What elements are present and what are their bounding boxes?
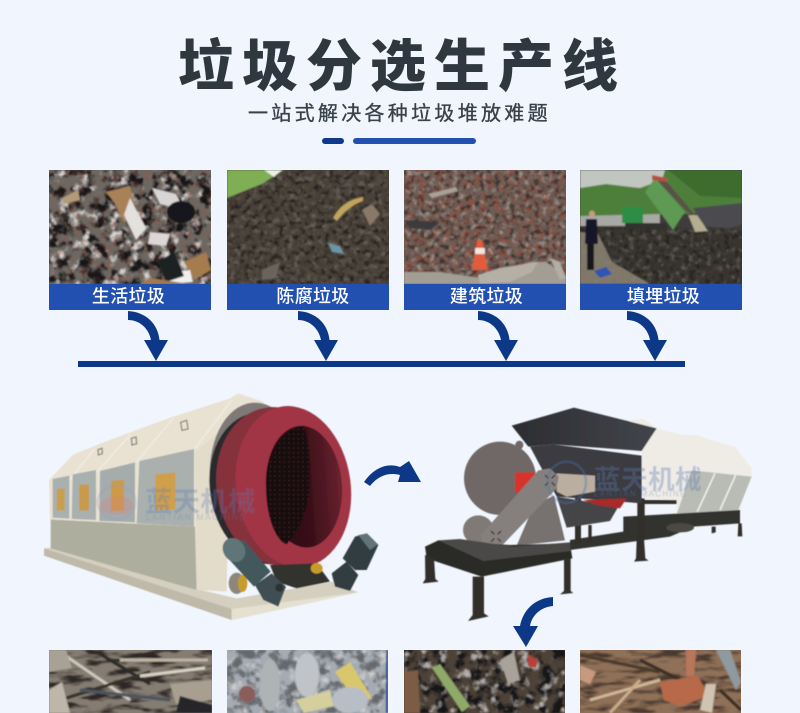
- housing: [49, 393, 265, 590]
- hopper: [512, 408, 657, 451]
- housing ridges: [69, 400, 232, 480]
- label bar: construction waste: [404, 284, 566, 310]
- housing lift handles: [98, 420, 188, 455]
- panel: construction waste: [404, 170, 566, 310]
- panel: landfill waste: [580, 170, 742, 310]
- photo: landfill waste: [580, 170, 742, 284]
- photo: sorted material 1: [49, 650, 212, 713]
- motor right: [343, 533, 378, 570]
- drive stand: [270, 563, 330, 588]
- title underline accents: [322, 138, 476, 144]
- machine: separator: [423, 408, 752, 621]
- front legs: [423, 555, 573, 621]
- photo: construction waste: [404, 170, 566, 284]
- title: 垃圾分选生产线: [178, 35, 626, 98]
- guard bolts: [491, 475, 555, 542]
- motor left: [225, 539, 271, 587]
- photo: sorted material 4: [580, 650, 741, 713]
- watermark: LANTIAN MACHINE: [146, 512, 247, 522]
- man: [589, 210, 595, 218]
- label bar: construction waste: 建筑垃圾: [450, 286, 523, 306]
- panel: household waste: [49, 170, 211, 310]
- drum: [202, 398, 318, 567]
- separator body: [530, 444, 642, 503]
- photo: sorted material 2: [227, 650, 388, 713]
- belt guard: [481, 468, 559, 549]
- grey panels: [53, 476, 69, 519]
- watermark: 蓝天机械: [594, 465, 702, 495]
- subtitle: 一站式解决各种垃圾堆放难题: [248, 102, 551, 125]
- lower box: [51, 519, 197, 590]
- white drum body: [630, 418, 752, 514]
- windows: [57, 488, 65, 511]
- conveyor bed: [570, 510, 740, 550]
- frame: [425, 540, 572, 577]
- base plate: [44, 548, 358, 620]
- watermark: 蓝天机械: [145, 486, 256, 517]
- label bar: aged waste: 陈腐垃圾: [276, 286, 350, 306]
- watermark: [98, 486, 256, 522]
- arrow: to magnetic separator: [364, 461, 421, 486]
- label bar: aged waste: [227, 284, 389, 310]
- watermark: LANTIAN MACHINE: [594, 489, 687, 498]
- label bar: household waste: [49, 284, 211, 310]
- truck: [645, 178, 685, 230]
- photo: aged waste: [227, 170, 389, 284]
- fan: [464, 442, 536, 515]
- label bar: landfill waste: [580, 284, 742, 310]
- motor: [463, 515, 494, 545]
- machine: trommel screen: [44, 393, 378, 620]
- wedge stand: [517, 496, 565, 546]
- arrow: to sorted materials: [513, 597, 553, 647]
- photo: sorted material 3: [404, 650, 565, 713]
- collector line: [78, 361, 685, 367]
- photo: household waste: [49, 170, 211, 284]
- rear legs: [575, 495, 742, 562]
- arrow: landfill waste to line: [627, 311, 667, 361]
- label bar: landfill waste: 填埋垃圾: [627, 286, 700, 306]
- label bar: household waste: 生活垃圾: [92, 286, 165, 306]
- arrow: household waste to line: [128, 311, 168, 361]
- watermark: [547, 462, 702, 503]
- panel: aged waste: [227, 170, 389, 310]
- arrow: aged waste to line: [298, 311, 338, 361]
- arrow: construction waste to line: [478, 311, 518, 361]
